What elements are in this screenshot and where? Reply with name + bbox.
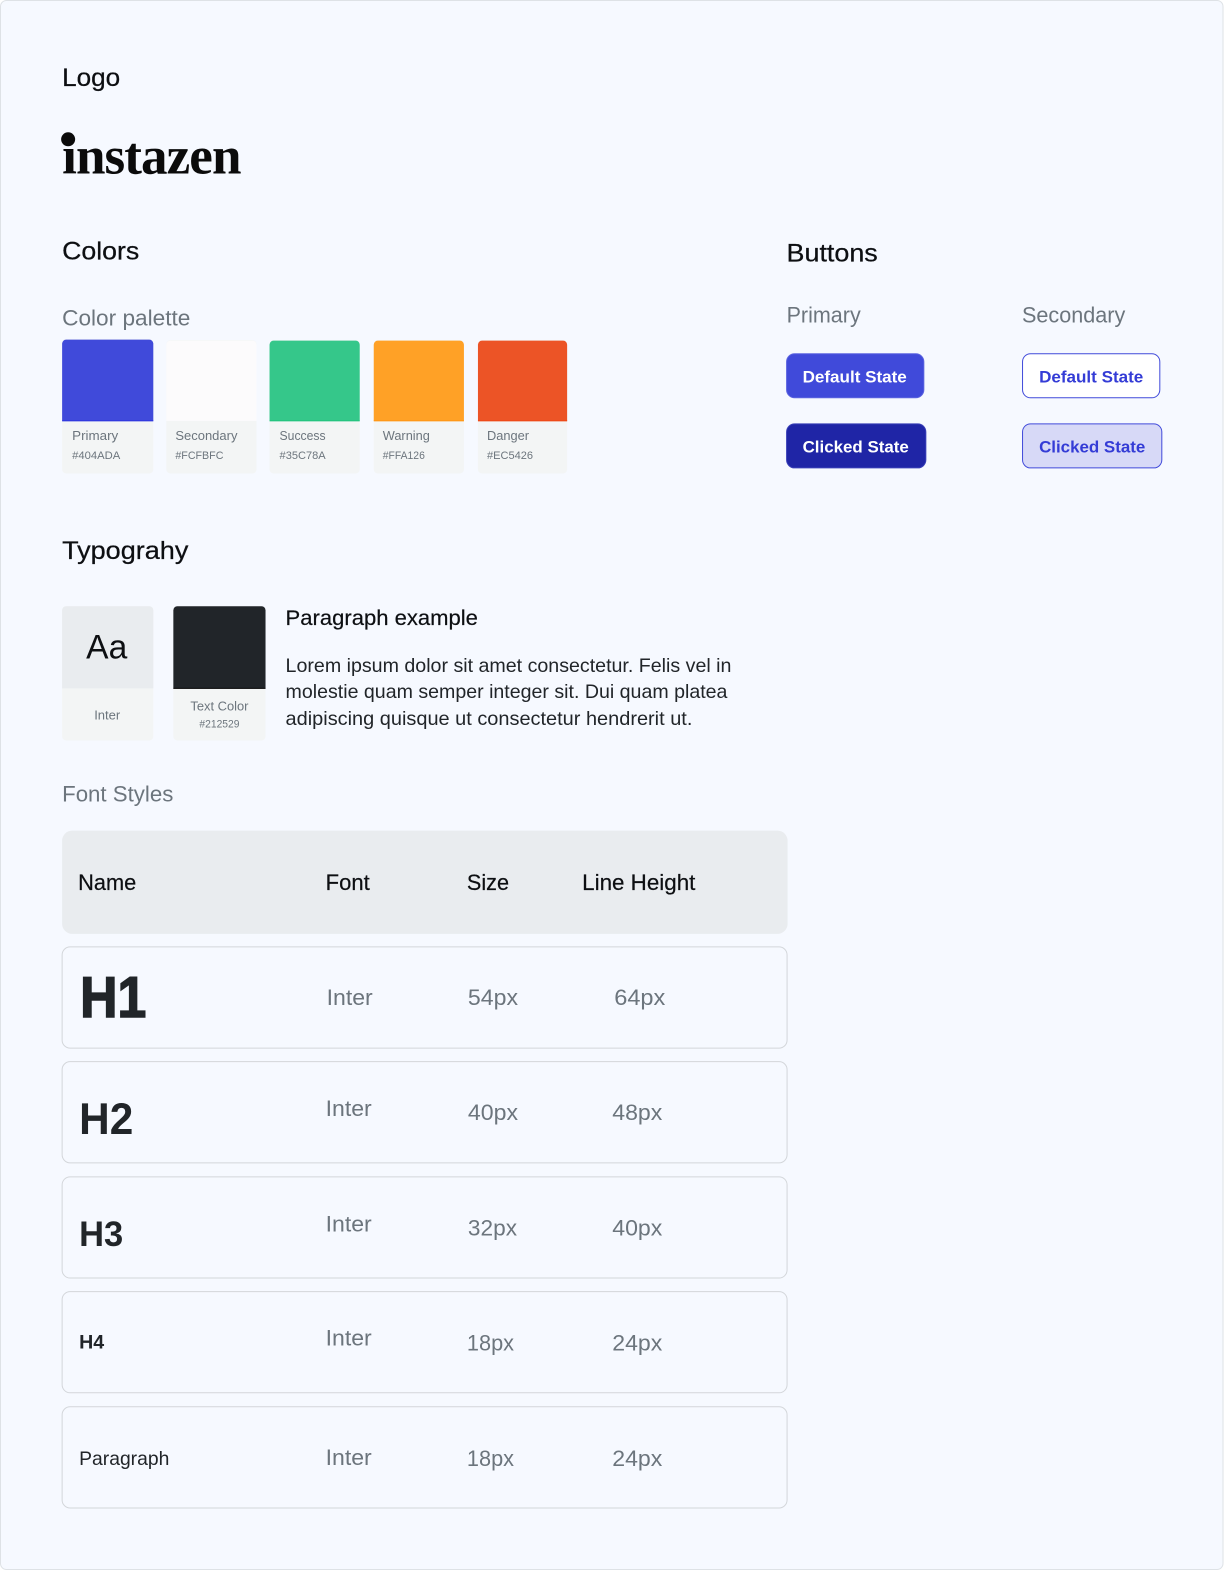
row: H3: H3 [79, 1215, 123, 1254]
swatch: primary: #404ADA [72, 450, 121, 462]
swatch: warning: #FFA126 [383, 450, 425, 462]
row: H4 [62, 1292, 787, 1393]
text color card: Text Color [190, 698, 249, 713]
font styles subheading: Font Styles [62, 782, 173, 807]
swatch: warning: Warning [383, 428, 430, 443]
row: H1: 64px [614, 985, 665, 1010]
swatch: primary: Primary [72, 428, 119, 443]
secondary column heading: Secondary [1022, 303, 1125, 328]
paragraph example: molestie quam semper integer sit. Dui quam platea [286, 682, 728, 703]
text color card: #212529 [199, 718, 239, 730]
buttons section [787, 240, 1162, 468]
font styles section [62, 782, 788, 1508]
swatch: secondary [166, 340, 257, 473]
swatch: danger [478, 340, 567, 473]
paragraph example [286, 607, 731, 730]
row: H2: H2 [79, 1095, 133, 1144]
typography section [62, 537, 731, 740]
colors heading: Colors [62, 238, 139, 266]
row: H2 [62, 1062, 787, 1163]
swatch: success: Success [280, 428, 326, 443]
paragraph example: Lorem ipsum dolor sit amet consectetur. Felis vel in [286, 656, 731, 677]
paragraph example: Paragraph example [286, 607, 478, 630]
button: secondary default [1023, 354, 1160, 398]
row: H3: 40px [612, 1215, 662, 1240]
row: H4: Inter [326, 1326, 372, 1351]
button: secondary clicked [1023, 424, 1162, 468]
buttons heading: Buttons [787, 240, 878, 268]
button: secondary default: Default State [1039, 367, 1143, 386]
row: H1 [62, 947, 787, 1048]
button: primary default [787, 354, 924, 398]
row: H4: 24px [612, 1331, 662, 1356]
row: H1: H1 [80, 966, 146, 1030]
swatch: danger: #EC5426 [487, 450, 533, 462]
color palette subheading: Color palette [62, 306, 190, 331]
table header: Line Height [582, 870, 695, 895]
paragraph example: adipiscing quisque ut consectetur hendrerit ut. [286, 709, 692, 730]
row: H2: 40px [468, 1100, 518, 1125]
row: H3: Inter [326, 1211, 372, 1236]
swatch: primary [62, 339, 153, 473]
row: H1: Inter [327, 985, 373, 1010]
row: Paragraph: 18px [467, 1446, 514, 1471]
text color card [173, 606, 266, 740]
row: Paragraph: 24px [612, 1446, 662, 1471]
font card: Inter [62, 606, 153, 740]
table header: Size [467, 870, 509, 895]
colors section [62, 238, 567, 473]
row: Paragraph [62, 1407, 787, 1508]
font card: Inter: Aa [86, 628, 127, 666]
swatch: danger: Danger [487, 428, 530, 443]
row: H4: 18px [467, 1331, 514, 1356]
row: H3 [62, 1177, 787, 1278]
button: primary clicked: Clicked State [803, 437, 909, 456]
logo wordmark: instazen [62, 127, 241, 185]
font card: Inter: Inter [94, 707, 121, 722]
logo section [61, 64, 241, 185]
row: H2: Inter [326, 1096, 372, 1121]
row: H4: H4 [79, 1333, 105, 1354]
typography heading: Typograhy [62, 537, 189, 565]
row: Paragraph: Paragraph [79, 1449, 169, 1470]
primary column heading: Primary [787, 303, 861, 328]
swatch: success [270, 340, 360, 473]
button: secondary clicked: Clicked State [1039, 437, 1145, 456]
swatch: secondary: #FCFBFC [175, 450, 223, 462]
button: primary clicked [787, 424, 926, 468]
row: H3: 32px [468, 1215, 517, 1240]
swatch: warning [374, 340, 464, 473]
row: H1: 54px [468, 985, 518, 1010]
button: primary default: Default State [803, 367, 907, 386]
table header: Name [78, 870, 136, 895]
logo heading: Logo [62, 64, 120, 92]
swatch: success: #35C78A [280, 450, 326, 462]
table header: Font [326, 870, 370, 895]
swatch: secondary: Secondary [175, 428, 238, 443]
table header [62, 831, 788, 934]
row: Paragraph: Inter [326, 1445, 372, 1470]
row: H2: 48px [612, 1100, 662, 1125]
